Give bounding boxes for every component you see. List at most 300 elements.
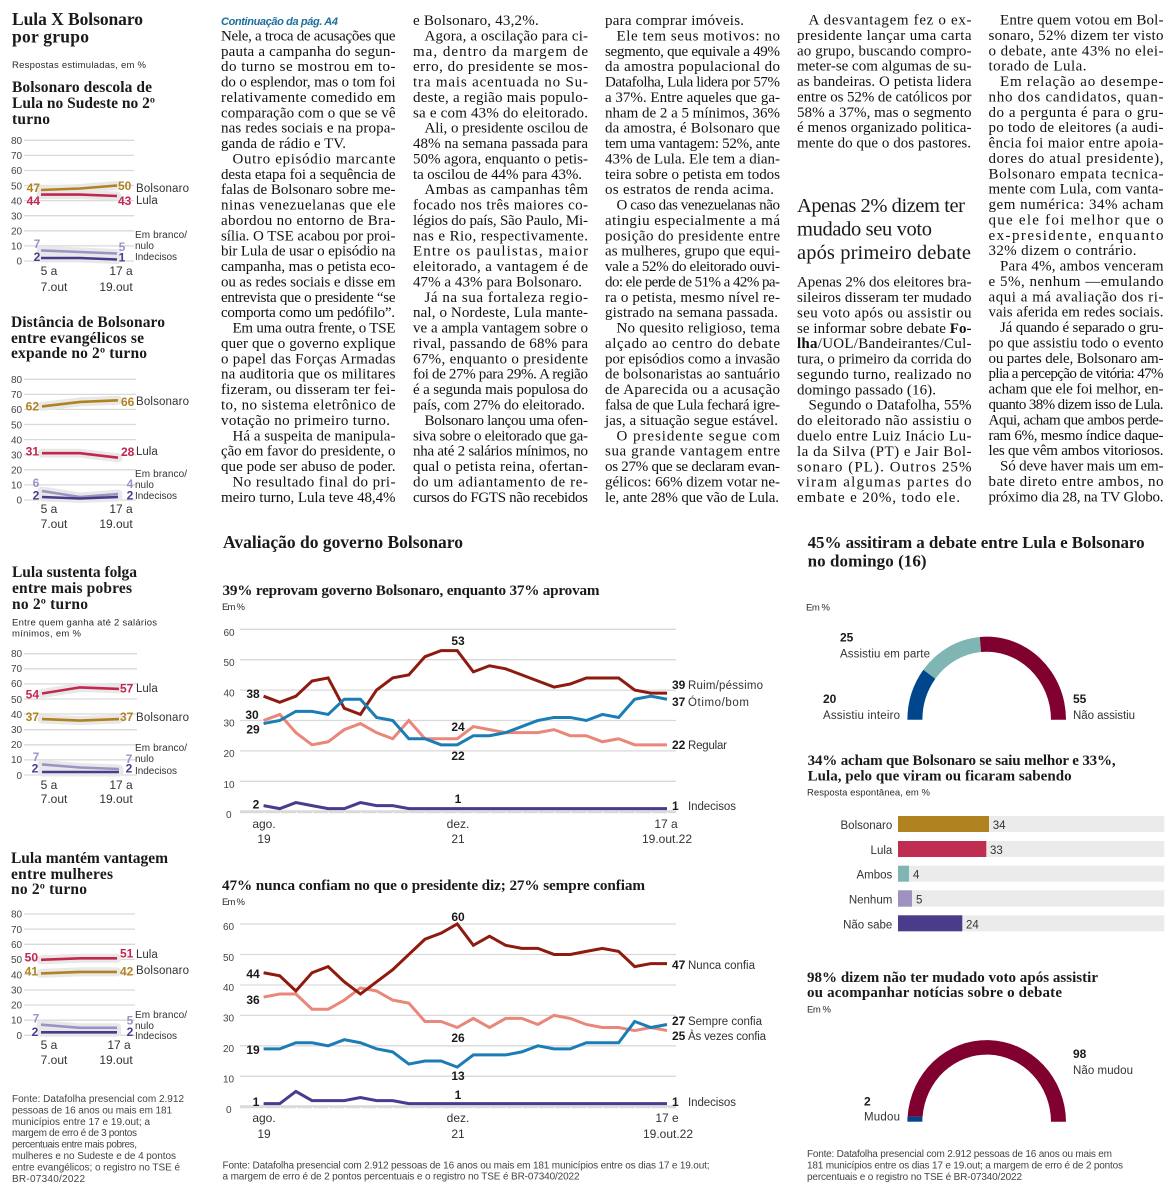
bar chart: desempenho: 4: [913, 870, 920, 882]
gauge labels: Mudou: [864, 1112, 900, 1124]
source note: right column: percentuais e o registro no TSE é BR-07340/2022: [807, 1172, 1022, 1183]
line chart: mulheres: 50: [11, 955, 23, 966]
line chart: Sudeste: 5 a: [41, 264, 58, 278]
text block: article column 3: sua grande vantagem entre: [605, 444, 780, 460]
heading: 34% acham: [808, 753, 1116, 785]
heading: mulheres: no 2º turno: [11, 881, 87, 898]
line chart: confiança: 10: [223, 1074, 235, 1086]
line chart: evangélicos: 2: [33, 488, 40, 502]
line chart: confiança: 20: [223, 1044, 235, 1055]
line chart: Sudeste: Em branco/: [135, 230, 187, 241]
gauge labels: Assistiu inteiro: [823, 710, 900, 722]
line chart: mulheres: 7.out: [41, 1053, 68, 1067]
line chart: mulheres: [11, 910, 189, 1067]
line chart: avaliação: 38: [246, 687, 260, 701]
line chart: confiança: 1: [672, 1095, 679, 1109]
heading: mulheres: Lula mantém vantagem: [11, 850, 168, 867]
line chart: evangélicos: 70: [11, 390, 23, 401]
line chart: avaliação: 29: [246, 722, 260, 736]
text block: article column 5: aqui a má avaliação dos ri-: [988, 289, 1164, 305]
text block: article column 3: 43% de Lula. Ele tem a dian-: [605, 151, 780, 167]
line chart: mais pobres: 2: [32, 762, 39, 776]
line chart: evangélicos: 80: [11, 375, 23, 386]
text block: article column 1: entrevista que o presidente “se: [221, 290, 396, 306]
bar chart: desempenho: [841, 816, 1164, 931]
line chart: confiança: 27: [672, 1014, 686, 1028]
text block: article column 1: [221, 28, 396, 506]
text block: article column 3: Datafolha, Lula lidera por 57%: [605, 74, 780, 90]
text block: article column 2: Já na sua fortaleza regio-: [424, 290, 588, 306]
subtitle: até 2 salários: mínimos, em %: [12, 628, 82, 640]
heading: 45% assistiram: [808, 533, 1145, 571]
line chart: mais pobres: 10: [11, 755, 23, 766]
text block: article column 2: 48% na semana passada para: [413, 136, 588, 152]
line chart: mulheres: 70: [11, 925, 23, 936]
text block: article column 4 bottom: sileiros disseram ter mudado: [797, 290, 972, 306]
heading: 34% acham: 34% acham que Bolsonaro se saiu melhor e 33%,: [808, 753, 1116, 769]
line chart: avaliação: ago.: [252, 817, 276, 831]
line chart: avaliação: 40: [224, 688, 235, 700]
text block: article column 2: sa e com 43% do eleitorado.: [413, 105, 588, 121]
source note: left column: margem de erro é de 3 pontos: [12, 1128, 137, 1139]
line chart: mulheres: 42: [120, 964, 134, 978]
line chart: Sudeste: 17 a: [109, 264, 133, 278]
text block: article column 3: por episódios como a invasão: [605, 351, 780, 367]
line chart: Sudeste: Indecisos: [135, 252, 177, 263]
text block: article column 5: ram 6%, mesmo índice daque-: [988, 428, 1164, 444]
text block: article column 4 bottom: seu voto após ou assistir ou: [797, 306, 972, 322]
line chart: confiança: 1: [253, 1095, 260, 1109]
text block: article column 4 bottom: do eleitorado não assistiu o: [797, 413, 972, 429]
line chart: mais pobres: 80: [11, 649, 23, 660]
text block: article column 5: sonaro, 52% dizem ter visto: [988, 28, 1164, 44]
subtitle: até 2 salários: Entre quem ganha até 2 salários: [12, 618, 157, 629]
text block: article column 1: relativamente comedido em: [221, 90, 396, 106]
source note: left column: pessoas de 16 anos ou mais em 181: [12, 1105, 172, 1116]
heading: mulheres: entre mulheres: [11, 866, 113, 883]
gauge labels: 25: [840, 631, 854, 645]
text block: article column 3: do: ele perde de 51% a 42% pa-: [605, 274, 780, 290]
text block: article column 3: da amostra populacional do: [605, 59, 780, 75]
text block: article column 2: Ambas as campanhas têm: [424, 182, 588, 198]
text block: article column 1: Há a suspeita de manipula-: [232, 428, 396, 444]
line chart: avaliação: 2: [253, 798, 260, 812]
line chart: evangélicos: 28: [121, 445, 135, 459]
gauge labels: [864, 1047, 1133, 1124]
heading: Apenas 2% dizem ter mudado: após primeiro debate: [797, 242, 971, 264]
text block: article column 3: O presidente segue com: [616, 428, 780, 444]
line chart: avaliação: 10: [224, 780, 235, 791]
title: Lula X Bolsonaro por grupo: por grupo: [12, 27, 89, 47]
source note: left column: [12, 1094, 184, 1185]
line chart: avaliação: 19.out.22: [642, 832, 692, 846]
source note: center: Fonte: Datafolha presencial com 2.912 pessoas de 16 anos ou mais em 181 municípios entre os dias 17 e 19.out;: [222, 1160, 710, 1171]
line chart: evangélicos: 10: [11, 480, 23, 492]
text block: article column 1: comparação com o que se vê: [221, 105, 396, 121]
text block: article column 4 top: as bandeiras. O petista lidera: [797, 74, 972, 90]
line chart: avaliação: 39: [672, 678, 686, 692]
heading: evangélicos: expande no 2º turno: [11, 345, 147, 362]
line chart: mais pobres: 2: [126, 762, 133, 776]
text block: article column 1: Nele, a troca de acusações que: [221, 28, 396, 44]
text block: article column 1: No resultado final do pri-: [232, 474, 396, 490]
line chart: mulheres: 41: [25, 964, 38, 978]
line chart: confiança: 30: [223, 1014, 235, 1024]
text block: article column 4 bottom: lha/UOL/Bandeirantes/Cul-: [797, 336, 972, 352]
line chart: mais pobres: 57: [120, 682, 134, 696]
kicker: continuação: Continuação da pág. A4: [221, 16, 338, 28]
line chart: Sudeste: 0: [16, 256, 22, 268]
line chart: evangélicos: 6: [33, 476, 40, 490]
line chart: avaliação: dez.: [447, 817, 469, 831]
source note: left column: municípios entre 17 e 19.out; a: [12, 1117, 150, 1128]
heading: Avaliação do governo Bolsonaro: Avaliação do governo Bolsonaro: [223, 532, 463, 552]
line chart: Sudeste: 50: [118, 179, 132, 193]
text block: article column 3: falsa de que Lula fechará igre-: [605, 398, 780, 414]
line chart: evangélicos: 66: [121, 395, 135, 409]
text block: article column 3: alçado ao centro do debate: [605, 336, 780, 352]
line chart: confiança: Sempre confia: [688, 1016, 763, 1028]
text block: article column 1: quer que o governo explique: [221, 336, 396, 352]
line chart: mulheres: 20: [11, 1000, 23, 1012]
line chart: evangélicos: 19.out: [99, 517, 133, 531]
heading: 34% acham: Lula, pelo que viram ou ficaram sabendo: [808, 769, 1072, 785]
text block: article column 1: Em uma outra frente, o TSE: [232, 321, 396, 337]
line chart: avaliação: 22: [672, 738, 686, 752]
text block: article column 2: Bolsonaro lançou uma ofen-: [424, 413, 588, 429]
source note: left column: Fonte: Datafolha presencial com 2.912: [12, 1094, 184, 1105]
text block: article column 1: ninas venezuelanas que ele: [221, 198, 396, 214]
line chart: Sudeste: Bolsonaro: [136, 183, 189, 195]
text block: article column 5: bate direto entre ambos, no: [988, 474, 1164, 490]
text block: article column 1: pauta a campanha do segun-: [221, 44, 396, 60]
text block: article column 5: ex-presidente, enquanto: [988, 228, 1164, 244]
source note: left column: entre evangélicos; o registro no TSE é: [12, 1162, 180, 1173]
text block: article column 2: qual o petista reina, ofertan-: [413, 459, 588, 475]
line chart: Sudeste: Lula: [136, 195, 158, 207]
line chart: avaliação: 60: [224, 628, 235, 639]
text block: article column 3: vale a 52% do eleitorado ouvi-: [605, 259, 780, 275]
line chart: evangélicos: 62: [26, 400, 39, 414]
text block: article column 3: No quesito religioso, tema: [616, 321, 780, 337]
line chart: confiança: 40: [223, 983, 235, 994]
text block: article column 1: meiro turno, Lula teve 48,4%: [221, 490, 396, 506]
line chart: Sudeste: nulo: [135, 241, 154, 252]
text block: article column 3: a 37%. Entre aqueles que ga-: [605, 90, 780, 106]
line chart: confiança: 19.out.22: [643, 1127, 693, 1141]
text block: article column 5: Para 4%, ambos venceram: [1000, 259, 1164, 275]
text block: article column 3: teira sobre o petista em todos: [605, 167, 780, 183]
line chart: confiança: 25: [672, 1029, 686, 1043]
text block: article column 1: nas redes sociais e na propa-: [221, 121, 396, 137]
line chart: evangélicos: 7.out: [41, 517, 68, 531]
panel: Sudeste: [11, 79, 189, 294]
text block: article column 1: bir Lula de usar o episódio na: [221, 244, 396, 260]
subtitle: até 2 salários: [12, 618, 157, 640]
line chart: Sudeste: 2: [34, 250, 41, 264]
panel: confiança no presidente: [222, 877, 767, 1141]
bar chart: desempenho: 33: [990, 845, 1003, 857]
line chart: mais pobres: 7: [126, 752, 133, 766]
line chart: Sudeste: 1: [119, 250, 126, 264]
source note: center: a margem de erro é de 2 pontos percentuais e o registro no TSE é BR-07340/2022: [222, 1172, 580, 1182]
line chart: mulheres: 7: [33, 1012, 40, 1026]
line chart: mulheres: 5: [127, 1014, 134, 1028]
line chart: Sudeste: 7.out: [41, 280, 68, 294]
line chart: avaliação: 1: [455, 792, 462, 806]
heading: Sudeste: [12, 79, 155, 128]
line chart: avaliação: 30: [224, 718, 235, 730]
text block: article column 3: jas, a situação segue estável.: [604, 413, 778, 429]
line chart: avaliação: Ótimo/bom: [688, 696, 749, 709]
text block: article column 2: Ali, o presidente oscilou de: [424, 121, 588, 137]
line chart: mais pobres: Em branco/: [135, 743, 187, 754]
line chart: Sudeste: 60: [11, 166, 23, 177]
line chart: mulheres: 2: [32, 1025, 39, 1039]
text block: article column 2: ma, dentro da margem de: [413, 44, 588, 60]
line chart: avaliação: 17 a: [654, 817, 678, 831]
line chart: Sudeste: 30: [11, 212, 23, 222]
heading: 98% dizem: [807, 970, 1098, 1001]
heading: evangélicos: entre evangélicos se: [11, 330, 144, 347]
text block: article column 1: do o esplendor, mas o tom foi: [221, 74, 396, 90]
line chart: mais pobres: Lula: [136, 683, 158, 695]
text block: article column 5: vais aferida em redes sociais.: [988, 305, 1164, 321]
line chart: mulheres: Em branco/: [135, 1010, 187, 1021]
line chart: Sudeste: 5: [119, 240, 126, 254]
line chart: evangélicos: 4: [127, 477, 134, 491]
text block: article column 1: desta etapa foi a sequência de: [221, 167, 396, 183]
bar chart: desempenho: 24: [966, 919, 979, 931]
text block: article column 4 bottom: [797, 275, 972, 506]
line chart: Sudeste: 80: [11, 136, 23, 147]
source note: left column: BR-07340/2022: [12, 1174, 85, 1185]
text block: article column 1: na auditoria que os militares: [221, 367, 396, 383]
line chart: mulheres: 30: [11, 986, 23, 996]
line chart: confiança: 1: [455, 1088, 462, 1102]
text block: article column 3: tem uma vantagem: 52%, ante: [605, 136, 780, 152]
text block: article column 2: é a segunda mais populosa do: [413, 382, 588, 398]
line chart: mulheres: Indecisos: [135, 1031, 177, 1042]
text block: article column 1: fizeram, ou disseram ter fei-: [221, 382, 396, 398]
gauge labels: Não mudou: [1073, 1065, 1133, 1077]
line chart: Sudeste: 47: [27, 181, 40, 195]
text block: article column 4 top: meter-se com algumas de su-: [797, 59, 972, 75]
text block: article column 5: nho dos candidatos, quan-: [988, 89, 1164, 105]
text block: article column 1: sília. O TSE acabou por proi-: [221, 228, 396, 244]
line chart: mais pobres: 19.out: [99, 792, 133, 806]
line chart: mulheres: 51: [120, 946, 134, 960]
text block: article column 4 bottom: duelo entre Luiz Inácio Lu-: [797, 428, 972, 444]
text block: article column 1: campanha, mas o petista eco-: [221, 259, 396, 275]
panel: quem se saiu melhor: [807, 753, 1164, 931]
source note: left column: mulheres e no Sudeste e de 4 pontos: [12, 1151, 176, 1162]
text block: article column 2: do um adiantamento de re-: [413, 474, 588, 490]
subtitle: resposta espontânea: Resposta espontânea, em %: [807, 788, 931, 799]
line chart: mais pobres: [11, 649, 189, 806]
line chart: avaliação: 30: [245, 708, 259, 722]
line chart: Sudeste: 10: [11, 242, 23, 252]
text block: article column 1: abordou no entorno de Bra-: [221, 213, 396, 229]
text block: article column 4 top: é menos organizado politica-: [797, 120, 972, 136]
heading: 45% assistiram: 45% assitiram a debate entre Lula e Bolsonaro: [808, 533, 1145, 552]
line chart: avaliação: 21: [451, 832, 465, 846]
text block: article column 5: po que assistiu todo o evento: [988, 336, 1164, 352]
text block: article column 5: acham que ele foi melhor, en-: [988, 382, 1164, 398]
heading: Apenas 2% dizem ter mudado: [797, 195, 971, 264]
text block: article column 3: atingiu especialmente a má: [605, 213, 780, 229]
text block: article column 5: que ele foi melhor que o: [988, 212, 1164, 228]
line chart: confiança: 47: [672, 958, 686, 972]
text block: article column 1: votação no primeiro turno.: [221, 413, 390, 429]
text block: article column 2: [413, 13, 588, 506]
source note: right column: Fonte: Datafolha presencial com 2.912 pessoas de 16 anos ou mais em: [807, 1149, 1112, 1160]
bar chart: desempenho: Nenhum: [849, 894, 892, 906]
line chart: mulheres: 19.out: [99, 1053, 133, 1067]
line chart: confiança: 60: [223, 922, 235, 933]
text block: article column 2: Agora, a oscilação para ci-: [424, 28, 588, 44]
line chart: mais pobres: 17 a: [109, 778, 133, 792]
line chart: evangélicos: Lula: [136, 446, 158, 458]
line chart: Sudeste: 44: [27, 194, 40, 208]
text block: article column 2: e Bolsonaro, 43,2%.: [413, 13, 539, 29]
text block: article column 2: cursos do FGTS não recebidos: [413, 490, 588, 506]
text block: article column 3: as mulheres, grupo que equi-: [605, 244, 780, 260]
line chart: mais pobres: 5 a: [41, 778, 58, 792]
unit label: Em %: [222, 897, 246, 908]
text block: article column 4 bottom: embate e 20%, todo ele.: [797, 490, 960, 506]
text block: article column 1: to, no sistema eletrônico de: [221, 398, 396, 414]
line chart: confiança: 17 e: [655, 1111, 679, 1125]
heading: Sudeste: turno: [12, 111, 50, 128]
text block: article column 1: que pode ser abuso de poder.: [221, 459, 396, 475]
text block: article column 2: nha até 2 salários mínimos, no: [413, 444, 588, 460]
line chart: mais pobres: 70: [11, 664, 23, 675]
chart heading: nunca confiam: 47% nunca confiam no que o presidente diz; 27% sempre confiam: [222, 877, 645, 894]
line chart: confiança: [223, 910, 767, 1141]
source note: right column: 181 municípios entre os dias 17 e 19.out; a margem de erro é de 2 pontos: [807, 1160, 1123, 1171]
gauge labels: Não assistiu: [1073, 710, 1135, 722]
line chart: mulheres: 17 a: [107, 1038, 131, 1052]
line chart: mulheres: 40: [11, 970, 23, 982]
line chart: avaliação: 22: [451, 749, 465, 763]
line chart: confiança: 50: [223, 953, 235, 964]
source note: right column: [807, 1149, 1123, 1183]
line chart: Sudeste: 40: [11, 196, 23, 208]
text block: article column 2: erro, do presidente se mos-: [413, 59, 588, 75]
heading: mais pobres: entre mais pobres: [12, 580, 132, 597]
line chart: evangélicos: 60: [11, 405, 23, 416]
text block: article column 3: gélicos: 66% dizem votar ne-: [605, 474, 780, 490]
text block: article column 2: 50% agora, enquanto o petis-: [413, 151, 588, 167]
bar chart: desempenho: Ambos: [857, 870, 893, 882]
gauge labels: [823, 631, 1135, 722]
text block: article column 1: comporta como um pedófilo”.: [221, 305, 395, 321]
line chart: mais pobres: 50: [11, 695, 23, 706]
line chart: evangélicos: 2: [127, 488, 134, 502]
line chart: evangélicos: 31: [26, 444, 39, 458]
line chart: avaliação: 50: [224, 658, 235, 669]
line chart: Sudeste: 7: [34, 237, 41, 251]
title: Lula X Bolsonaro por grupo: Lula X Bolsonaro: [12, 9, 143, 29]
heading: 98% dizem: ou acompanhar notícias sobre o debate: [807, 985, 1062, 1001]
line chart: avaliação: [224, 628, 763, 846]
text block: article column 3: ra o petista, mesmo nível re-: [605, 290, 780, 306]
text block: article column 5: Aqui, acham que ambos perde-: [988, 412, 1164, 428]
line chart: evangélicos: Indecisos: [135, 491, 177, 502]
line chart: mais pobres: Bolsonaro: [136, 712, 189, 724]
text block: article column 5: mente com Lula, com vanta-: [988, 182, 1164, 198]
gauge chart: assistiu ao debate: [907, 637, 1066, 720]
heading: evangélicos: [11, 314, 165, 362]
line chart: avaliação: Regular: [688, 740, 727, 752]
line chart: confiança: Indecisos: [688, 1097, 736, 1109]
bar chart: desempenho: 5: [916, 894, 922, 906]
text block: article column 2: eleitorado, a vantagem é de: [413, 259, 588, 275]
text block: article column 5: Já quando é separado o gru-: [1000, 320, 1164, 336]
line chart: mais pobres: Indecisos: [135, 766, 177, 777]
text block: article column 5: Em relação ao desempe-: [1000, 74, 1164, 90]
line chart: confiança: 21: [451, 1127, 465, 1141]
text block: article column 5: [988, 12, 1164, 505]
panel: mais pobres: [11, 564, 189, 806]
line chart: evangélicos: Em branco/: [135, 469, 187, 480]
text block: article column 2: país, com 27% do eleitorado.: [413, 398, 585, 414]
line chart: Sudeste: 20: [11, 226, 23, 238]
text block: article column 4 bottom: Segundo o Datafolha, 55%: [808, 398, 972, 414]
line chart: mais pobres: 37: [26, 710, 39, 724]
text block: article column 2: nal, o Nordeste, Lula mante-: [413, 305, 588, 321]
line chart: confiança: 26: [451, 1031, 465, 1045]
line chart: mais pobres: 37: [120, 710, 134, 724]
text block: article column 3: os 27% que se declaram evan-: [605, 459, 780, 475]
line chart: evangélicos: Bolsonaro: [136, 396, 189, 408]
line chart: Sudeste: 50: [11, 182, 23, 192]
text block: article column 5: torado de Lula.: [988, 59, 1086, 75]
line chart: avaliação: 53: [451, 634, 465, 648]
text block: article column 2: tra mais acentuada no Su-: [413, 74, 588, 90]
line chart: mais pobres: 7: [33, 750, 40, 764]
line chart: confiança: 60: [451, 910, 465, 924]
heading: 45% assistiram: no domingo (16): [808, 552, 927, 571]
title: Lula X Bolsonaro por grupo: [12, 9, 143, 47]
heading: 98% dizem: 98% dizem não ter mudado voto após assistir: [807, 970, 1098, 986]
text block: article column 3: os estratos de renda acima.: [605, 182, 774, 198]
text block: article column 1: falas de Bolsonaro sobre me-: [221, 182, 396, 198]
text block: article column 3: [604, 13, 780, 506]
text block: article column 1: ou as redes sociais e disse em: [221, 274, 396, 290]
unit label: Em %: [807, 1005, 832, 1016]
text block: article column 5: Só deve haver mais um em-: [1000, 458, 1164, 474]
gauge labels: 98: [1073, 1047, 1087, 1061]
line chart: mulheres: 80: [11, 910, 23, 920]
text block: article column 4 top: entre os 52% de católicos por: [797, 89, 972, 105]
text block: article column 5: Bolsonaro empata tecnica-: [988, 166, 1164, 182]
gauge chart: mudança de voto: [907, 1040, 1066, 1122]
line chart: confiança: Às vezes confia: [688, 1030, 767, 1043]
line chart: evangélicos: 17 a: [109, 502, 133, 516]
text block: article column 1: ção em favor do presidente, o: [221, 444, 396, 460]
text block: article column 5: ência foi maior entre apoia-: [988, 136, 1164, 152]
text block: article column 4 bottom: la da Silva (PT) e Jair Bol-: [797, 444, 972, 460]
line chart: confiança: Nunca confia: [688, 960, 756, 972]
line chart: mulheres: 60: [11, 940, 23, 951]
line chart: avaliação: Indecisos: [688, 801, 736, 813]
text block: article column 3: Ele tem seus motivos: no: [616, 28, 780, 44]
panel: assistiram ao debate: [806, 533, 1145, 722]
text block: article column 4 bottom: Apenas 2% dos eleitores bra-: [797, 275, 972, 291]
text block: article column 5: 32% dizem o contrário.: [988, 243, 1136, 259]
